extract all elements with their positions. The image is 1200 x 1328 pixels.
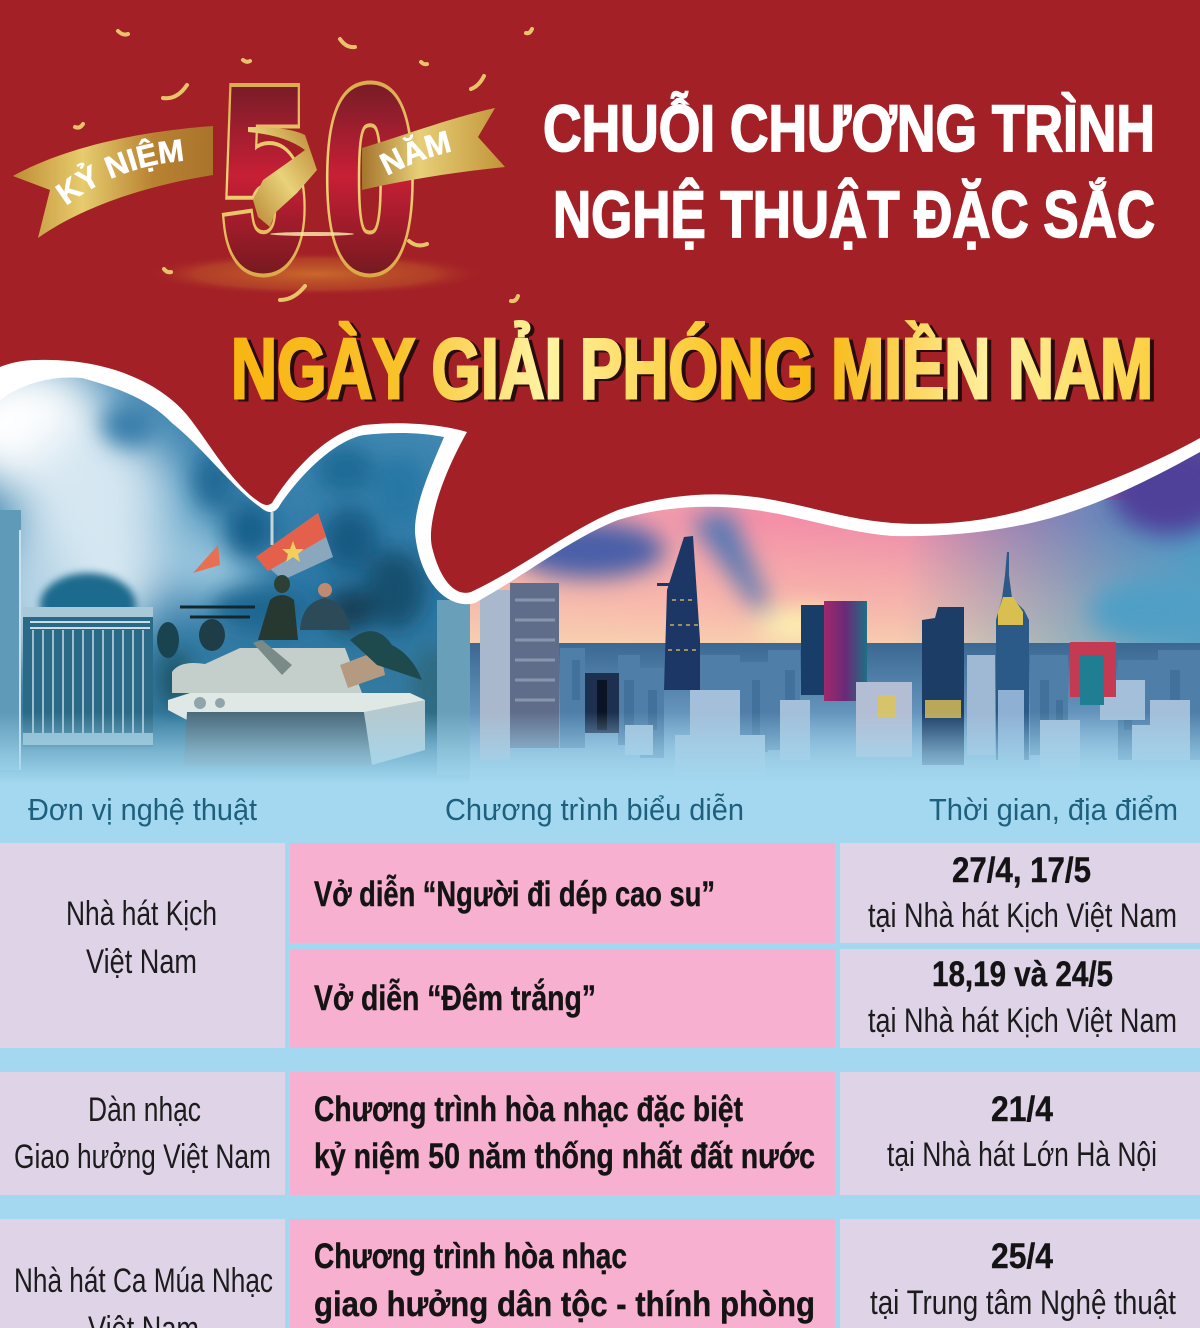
header: time and place: Thời gian, địa điểm: [929, 792, 1178, 827]
unit name: Nhà hát Ca Múa Nhạc: [14, 1262, 273, 1300]
tower: dark low: [585, 673, 619, 733]
low rise blocks: [560, 648, 1200, 760]
time and place: 18,19 và 24/5: [932, 955, 1113, 994]
ribbon fold: [248, 127, 317, 227]
gate pillar left: [0, 510, 21, 770]
small flag: [193, 545, 220, 573]
table group 3: [0, 1219, 1200, 1328]
tower: left faint: [480, 590, 510, 760]
large flag: [256, 513, 333, 580]
logo: 50 years: [13, 26, 534, 318]
program: [314, 1237, 815, 1324]
smoke cloud: [0, 360, 253, 670]
tower: Vietcombank: [996, 552, 1029, 760]
flag pole: [270, 512, 274, 545]
unit name: Việt Nam: [86, 943, 197, 981]
dark foliage: [102, 403, 459, 735]
sky: [470, 452, 1200, 643]
unit name: [14, 1262, 273, 1328]
time and place: [887, 1090, 1157, 1174]
sparkle: [270, 232, 354, 236]
unit name: Giao hưởng Việt Nam: [14, 1138, 271, 1176]
title: [231, 91, 1155, 417]
program: Vở diễn “Người đi dép cao su”: [314, 874, 715, 914]
tower: Saigon Centre: [510, 583, 559, 748]
gate: [23, 607, 153, 747]
tower: red and teal: [1070, 642, 1116, 705]
tower: pale building: [856, 682, 912, 757]
time and place: [868, 851, 1177, 935]
table group 2: [0, 1072, 1200, 1195]
confetti: [75, 29, 532, 301]
program: kỷ niệm 50 năm thống nhất đất nước: [314, 1137, 815, 1176]
ribbon text: ky niem: KỶ NIỆM: [54, 138, 184, 205]
time and place: [870, 1237, 1176, 1322]
soldiers on tank: [157, 575, 350, 658]
red wave banner: [0, 0, 1200, 593]
tank: [168, 631, 425, 765]
tower: Bitexco: [657, 536, 700, 690]
mottled small buildings: [572, 660, 1180, 740]
fade from photos into table: [0, 712, 1200, 783]
time and place: [868, 955, 1177, 1040]
numeral 0 fill: 0: [326, 39, 414, 318]
numeral 5 fill: 5: [224, 39, 304, 318]
program: [314, 1090, 815, 1176]
unit name: [14, 1091, 271, 1176]
table header: [0, 783, 1200, 843]
program: giao hưởng dân tộc - thính phòng: [314, 1285, 815, 1324]
unit name: Dàn nhạc: [88, 1091, 201, 1129]
program: Vở diễn “Đêm trắng”: [314, 978, 596, 1018]
machine gun: [180, 607, 255, 617]
unit name: [66, 895, 217, 981]
program: Chương trình hòa nhạc: [314, 1237, 627, 1276]
photo: tank at the palace gate: [0, 355, 480, 785]
stage glow: [143, 252, 487, 296]
numeral 5 outline: 5: [224, 39, 304, 318]
photo: Ho Chi Minh City skyline at dusk: [470, 452, 1200, 766]
numeral 0 outline: 0: [326, 39, 414, 318]
time and place: 21/4: [991, 1090, 1053, 1129]
ribbon text: nam: NĂM: [378, 130, 452, 176]
program: Chương trình hòa nhạc đặc biệt: [314, 1090, 743, 1129]
gate pillar right: [437, 600, 470, 770]
city mass: [470, 643, 1200, 766]
header: unit: Đơn vị nghệ thuật: [28, 792, 257, 827]
tower: dark glass: [922, 607, 964, 765]
time and place: 25/4: [991, 1237, 1053, 1276]
ribbon left: [13, 126, 213, 238]
tree behind gate: [34, 566, 142, 607]
towers: twin: [801, 601, 867, 701]
unit name: Nhà hát Kịch: [66, 895, 217, 933]
time and place: 27/4, 17/5: [952, 851, 1091, 890]
ribbon right: [362, 108, 505, 190]
table group 1: [0, 843, 1200, 1048]
header: program: Chương trình biểu diễn: [445, 792, 744, 827]
white wave border: [0, 0, 1200, 604]
